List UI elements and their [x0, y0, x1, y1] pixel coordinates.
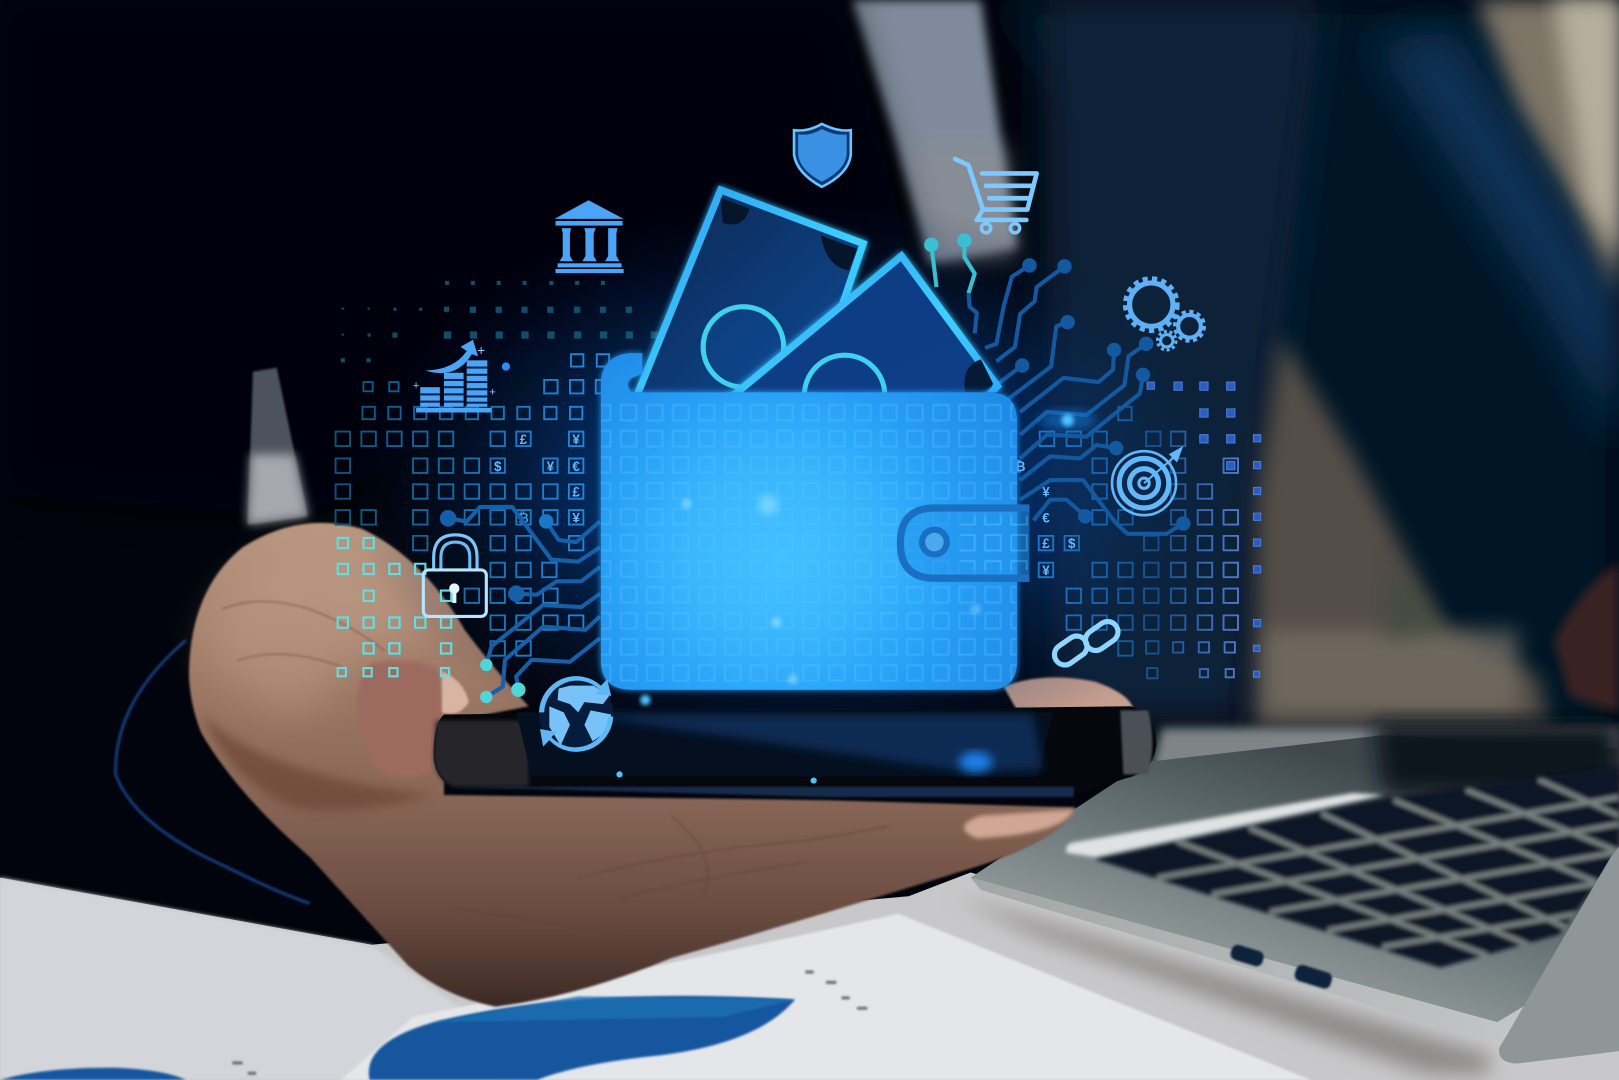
keyboard — [1094, 766, 1619, 967]
icon: growth chart — [413, 340, 496, 412]
icon: chain link — [1050, 617, 1122, 669]
data grid: right dots — [1147, 382, 1261, 677]
currency symbols: € — [1042, 510, 1050, 525]
data grid: squares over thumb — [338, 538, 451, 676]
fingertip above phone — [1004, 677, 1134, 710]
light sparkles — [502, 362, 1097, 784]
data grid: left squares — [336, 354, 609, 656]
currency symbols: ¥ — [572, 432, 580, 447]
icon: growth chart: + — [413, 380, 420, 392]
banknote: front — [726, 248, 1006, 392]
hand holding phone — [189, 523, 1134, 1007]
currency symbols: $ — [1068, 536, 1076, 551]
skin creases — [222, 601, 888, 934]
currency symbols: ¥ — [1042, 485, 1050, 500]
currency symbols: £ — [572, 485, 580, 500]
currency symbols: $ — [494, 459, 502, 474]
currency symbols — [494, 432, 1076, 578]
laptop hinge — [1499, 847, 1619, 1063]
data grid: right squares — [1039, 407, 1238, 678]
currency symbols: £ — [520, 432, 528, 447]
fingertip highlight — [964, 809, 1074, 838]
phone screen glow — [959, 752, 992, 772]
currency symbols: ₿ — [518, 510, 529, 525]
hand silhouette — [189, 523, 1076, 1007]
laptop deck — [971, 735, 1619, 1022]
circuit lines: right — [924, 233, 1191, 534]
currency symbols: ¥ — [572, 510, 580, 525]
banknote: rear — [630, 190, 863, 413]
wallet — [601, 353, 1030, 697]
icon: bank — [554, 200, 624, 273]
thumb shadow — [201, 712, 434, 811]
smartphone — [434, 706, 1156, 797]
laptop ports — [1229, 943, 1334, 990]
icon: growth chart: + — [489, 386, 496, 398]
circuit lines: left — [442, 507, 600, 703]
sleeve outline — [116, 640, 310, 903]
person's far hand blur — [1554, 563, 1619, 712]
icon: gears — [1125, 279, 1204, 350]
data grid: upper dots — [341, 281, 658, 362]
table and document — [0, 872, 1619, 1080]
wallet clasp — [900, 508, 1029, 578]
icon: growth chart: + — [477, 343, 485, 358]
currency symbols: ¥ — [547, 459, 555, 474]
icon: padlock — [423, 535, 486, 616]
icon: shopping cart — [955, 159, 1037, 233]
wallet grid — [601, 398, 1017, 697]
icon: target — [1112, 446, 1183, 515]
icon: globe — [539, 676, 613, 752]
thumbnail — [357, 661, 442, 777]
currency symbols: ₿ — [1015, 459, 1026, 474]
currency symbols: € — [572, 459, 580, 474]
currency symbols: ¥ — [1042, 563, 1050, 578]
icon: shield — [794, 124, 851, 187]
laptop — [971, 723, 1619, 1063]
laptop screen edge — [1066, 793, 1384, 857]
hologram halo — [351, 196, 1260, 774]
skin light — [207, 547, 434, 712]
currency symbols: £ — [1042, 536, 1050, 551]
